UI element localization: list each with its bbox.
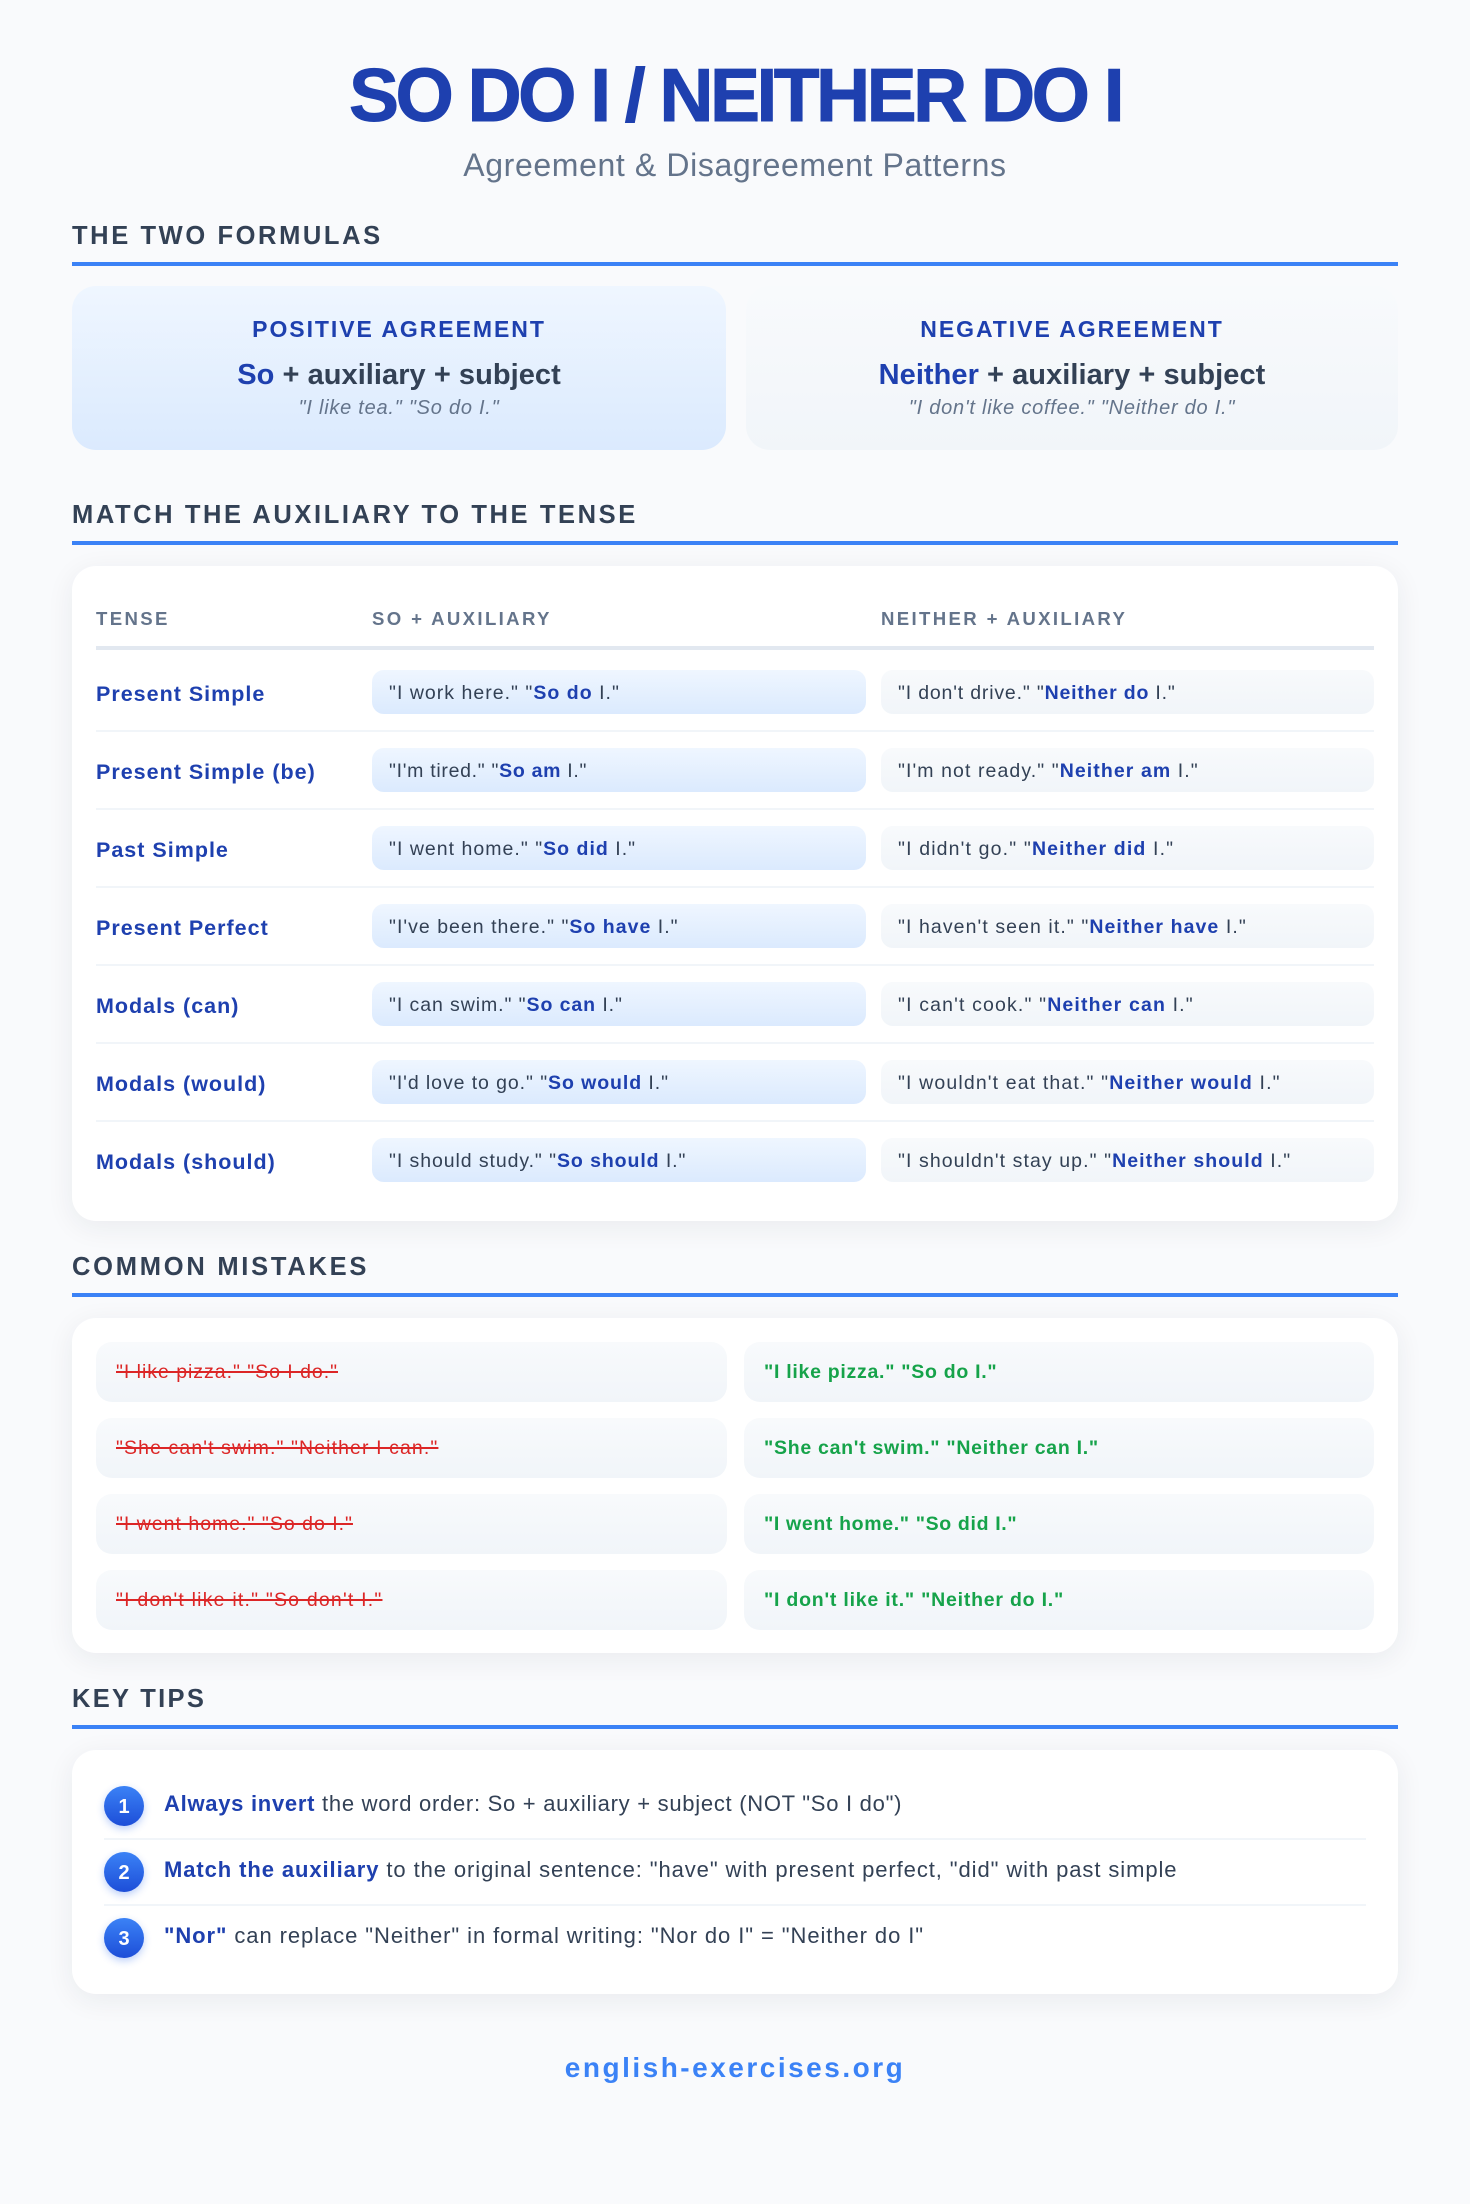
heading: match the auxiliary: MATCH THE AUXILIARY TO THE TENSE bbox=[72, 501, 638, 529]
text: "I shouldn't stay up." "Neither should I." bbox=[898, 1150, 1291, 1172]
mistake 4 wrong bbox=[96, 1570, 727, 1630]
text: "I can't cook." "Neither can I." bbox=[898, 994, 1194, 1016]
icon: number 2 bbox=[104, 1852, 144, 1892]
example: positive: "I like tea." "So do I." bbox=[299, 397, 499, 419]
example: negative: "I don't like coffee." "Neither do I." bbox=[909, 397, 1235, 419]
heading: the two formulas: THE TWO FORMULAS bbox=[72, 222, 383, 250]
table header bbox=[96, 608, 1127, 629]
text: "I work here." "So do I." bbox=[389, 682, 620, 704]
text: "I haven't seen it." "Neither have I." bbox=[898, 916, 1247, 938]
row: present simple be: Present Simple (be) bbox=[96, 760, 316, 784]
row: past simple: Past Simple bbox=[96, 838, 229, 862]
panel: common mistakes bbox=[72, 1318, 1398, 1653]
text: "I didn't go." "Neither did I." bbox=[898, 838, 1174, 860]
row: present simple: Present Simple bbox=[96, 682, 265, 706]
panel: tense table bbox=[72, 566, 1398, 1221]
table header: TENSE bbox=[96, 608, 170, 629]
row: present perfect: Present Perfect bbox=[96, 916, 269, 940]
tip 2: Match the auxiliary to the original sentence: "have" with present perfect, "did" with past simple bbox=[164, 1857, 1177, 1882]
mistake 3 wrong: "I went home." "So do I." bbox=[116, 1513, 353, 1535]
icon: number 1: 1 bbox=[118, 1796, 130, 1818]
mistake 1 wrong: "I like pizza." "So I do." bbox=[116, 1361, 338, 1383]
icon: number 3: 3 bbox=[118, 1928, 130, 1950]
icon: number 3 bbox=[104, 1918, 144, 1958]
mistake 1 correct bbox=[744, 1342, 1374, 1402]
text: "I don't drive." "Neither do I." bbox=[898, 682, 1176, 704]
formula: negative: Neither + auxiliary + subject bbox=[879, 359, 1265, 391]
table header: SO + AUXILIARY bbox=[372, 608, 552, 629]
icon: number 2: 2 bbox=[118, 1862, 130, 1884]
mistake 3 wrong bbox=[96, 1494, 727, 1554]
card heading: positive: POSITIVE AGREEMENT bbox=[252, 316, 546, 342]
tip 1: Always invert the word order: So + auxiliary + subject (NOT "So I do") bbox=[164, 1791, 902, 1816]
tip 3: "Nor" can replace "Neither" in formal writing: "Nor do I" = "Neither do I" bbox=[164, 1923, 924, 1948]
mistake 1 correct: "I like pizza." "So do I." bbox=[764, 1361, 997, 1383]
mistake 3 correct bbox=[744, 1494, 1374, 1554]
panel: key tips bbox=[72, 1750, 1398, 1994]
row: modals would: Modals (would) bbox=[96, 1072, 266, 1096]
formula: positive: So + auxiliary + subject bbox=[237, 359, 561, 391]
mistake 4 correct: "I don't like it." "Neither do I." bbox=[764, 1589, 1064, 1611]
card heading: negative: NEGATIVE AGREEMENT bbox=[920, 316, 1224, 342]
row: modals can: Modals (can) bbox=[96, 994, 239, 1018]
text: "I'm tired." "So am I." bbox=[389, 760, 587, 782]
mistake 2 wrong bbox=[96, 1418, 727, 1478]
panel: positive agreement bbox=[72, 286, 726, 450]
icon: number 1 bbox=[104, 1786, 144, 1826]
mistake 1 wrong bbox=[96, 1342, 727, 1402]
footer url: english-exercises.org bbox=[565, 2052, 905, 2083]
panel: negative agreement bbox=[746, 286, 1398, 450]
heading: common mistakes: COMMON MISTAKES bbox=[72, 1253, 369, 1281]
mistake 3 correct: "I went home." "So did I." bbox=[764, 1513, 1017, 1535]
text: "I can swim." "So can I." bbox=[389, 994, 623, 1016]
row: modals should: Modals (should) bbox=[96, 1150, 276, 1174]
table header: NEITHER + AUXILIARY bbox=[881, 608, 1127, 629]
mistake 4 correct bbox=[744, 1570, 1374, 1630]
mistake 2 correct bbox=[744, 1418, 1374, 1478]
text: "I'm not ready." "Neither am I." bbox=[898, 760, 1199, 782]
title: SO DO I / NEITHER DO I bbox=[349, 53, 1121, 137]
text: "I should study." "So should I." bbox=[389, 1150, 686, 1172]
heading: key tips: KEY TIPS bbox=[72, 1685, 206, 1713]
text: "I wouldn't eat that." "Neither would I." bbox=[898, 1072, 1281, 1094]
mistake 2 wrong: "She can't swim." "Neither I can." bbox=[116, 1437, 438, 1459]
mistake 2 correct: "She can't swim." "Neither can I." bbox=[764, 1437, 1099, 1459]
text: "I've been there." "So have I." bbox=[389, 916, 679, 938]
subtitle: Agreement & Disagreement Patterns bbox=[463, 147, 1007, 183]
mistake 4 wrong: "I don't like it." "So don't I." bbox=[116, 1589, 382, 1611]
text: "I went home." "So did I." bbox=[389, 838, 636, 860]
text: "I'd love to go." "So would I." bbox=[389, 1072, 669, 1094]
